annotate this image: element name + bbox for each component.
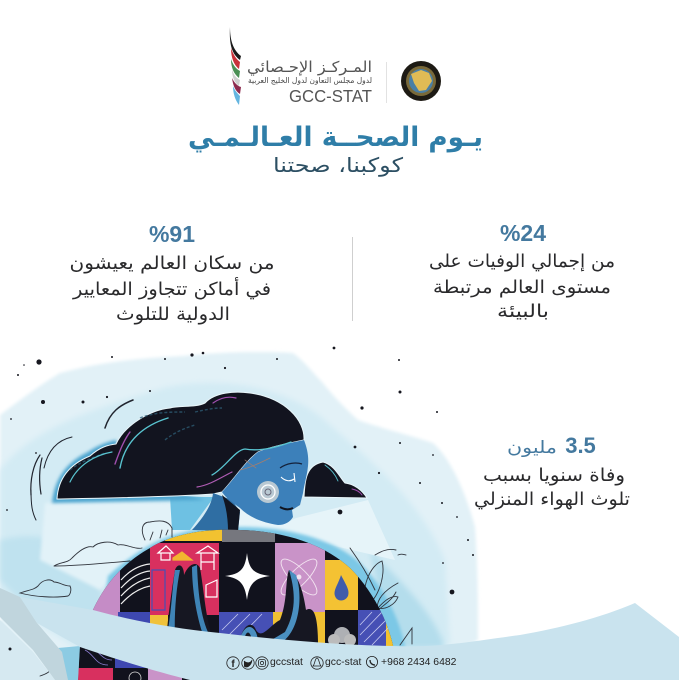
- header logos: [230, 27, 441, 106]
- patchwork garment: [92, 530, 394, 646]
- doodle clouds, elephant and plants: [20, 521, 412, 678]
- title: يـوم الصحــة العـالـمـي: [188, 122, 483, 153]
- stat: 91 percent: من سكان العالم يعيشون: [70, 253, 274, 274]
- logo arabic name: المـركـز الإحـصائي: [247, 58, 372, 77]
- hair highlights: [31, 397, 362, 520]
- stat: 24 percent: مستوى العالم مرتبطة: [433, 277, 611, 298]
- diagonal stripes: [222, 612, 388, 645]
- four pointed star: [225, 553, 270, 600]
- neck shadow: [222, 495, 240, 531]
- scattered dots: [6, 347, 474, 650]
- mouth: [280, 507, 293, 509]
- icons: social media: f: [231, 659, 235, 670]
- patch row two: [118, 610, 394, 646]
- hair: [57, 392, 304, 499]
- subtitle: كوكبنا، صحتنا: [273, 153, 404, 177]
- footer wave band: [20, 597, 679, 680]
- stat: 3.5 million: مليون: [507, 438, 557, 458]
- atom: [280, 558, 318, 596]
- icons: social media: [227, 656, 378, 670]
- right hand: [240, 570, 318, 645]
- water drop: [335, 575, 349, 600]
- blue wedge beside garment: [58, 646, 80, 680]
- footer contact bar: [227, 656, 457, 670]
- logo arabic subtitle: لدول مجلس التعاون لدول الخليج العربية: [248, 76, 372, 85]
- logo latin name: GCC-STAT: [289, 86, 372, 106]
- grey wave strip: [0, 588, 68, 680]
- neck: [192, 493, 240, 531]
- stat: 24 percent: بالبيئة: [497, 301, 549, 322]
- garment below band: [78, 647, 190, 680]
- stat: 3.5 million: تلوث الهواء المنزلي: [474, 489, 630, 510]
- illustration: woman embracing the planet: [0, 347, 478, 680]
- hair behind: [304, 462, 367, 498]
- left hand: [167, 564, 207, 626]
- icon: GCC emblem: [401, 61, 441, 101]
- stat: 3.5 million: وفاة سنويا بسبب: [483, 465, 625, 486]
- phone number: +968 2434 6482: [381, 657, 457, 668]
- handle: gcc-stat: gcc-stat: [325, 657, 361, 668]
- stat: 91 percent: الدولية للتلوث: [116, 304, 230, 325]
- stat: 24 percent: من إجمالي الوفيات على: [429, 251, 615, 272]
- stat: 3.5 million: [474, 433, 630, 510]
- eyebrow: [280, 463, 302, 468]
- watercolour background: [0, 352, 478, 680]
- houses: [152, 546, 218, 610]
- stat: 3.5 million: 3.5: [565, 433, 596, 458]
- patch row one: [93, 530, 358, 616]
- handle: gccstat: gccstat: [270, 657, 303, 668]
- stat: 91 percent: في أماكن تتجاوز المعايير: [72, 277, 271, 300]
- stat: 91 percent: %91: [149, 221, 195, 247]
- face: [222, 440, 308, 525]
- earring: [257, 481, 279, 503]
- stat: 91 percent: [70, 221, 274, 325]
- stat: 24 percent: [429, 220, 615, 322]
- hair texture: [70, 408, 222, 470]
- closed eye: [281, 473, 295, 482]
- stat: 24 percent: %24: [500, 220, 546, 246]
- white curve patch: [121, 564, 150, 604]
- icon: coloured ribbon: [230, 27, 241, 105]
